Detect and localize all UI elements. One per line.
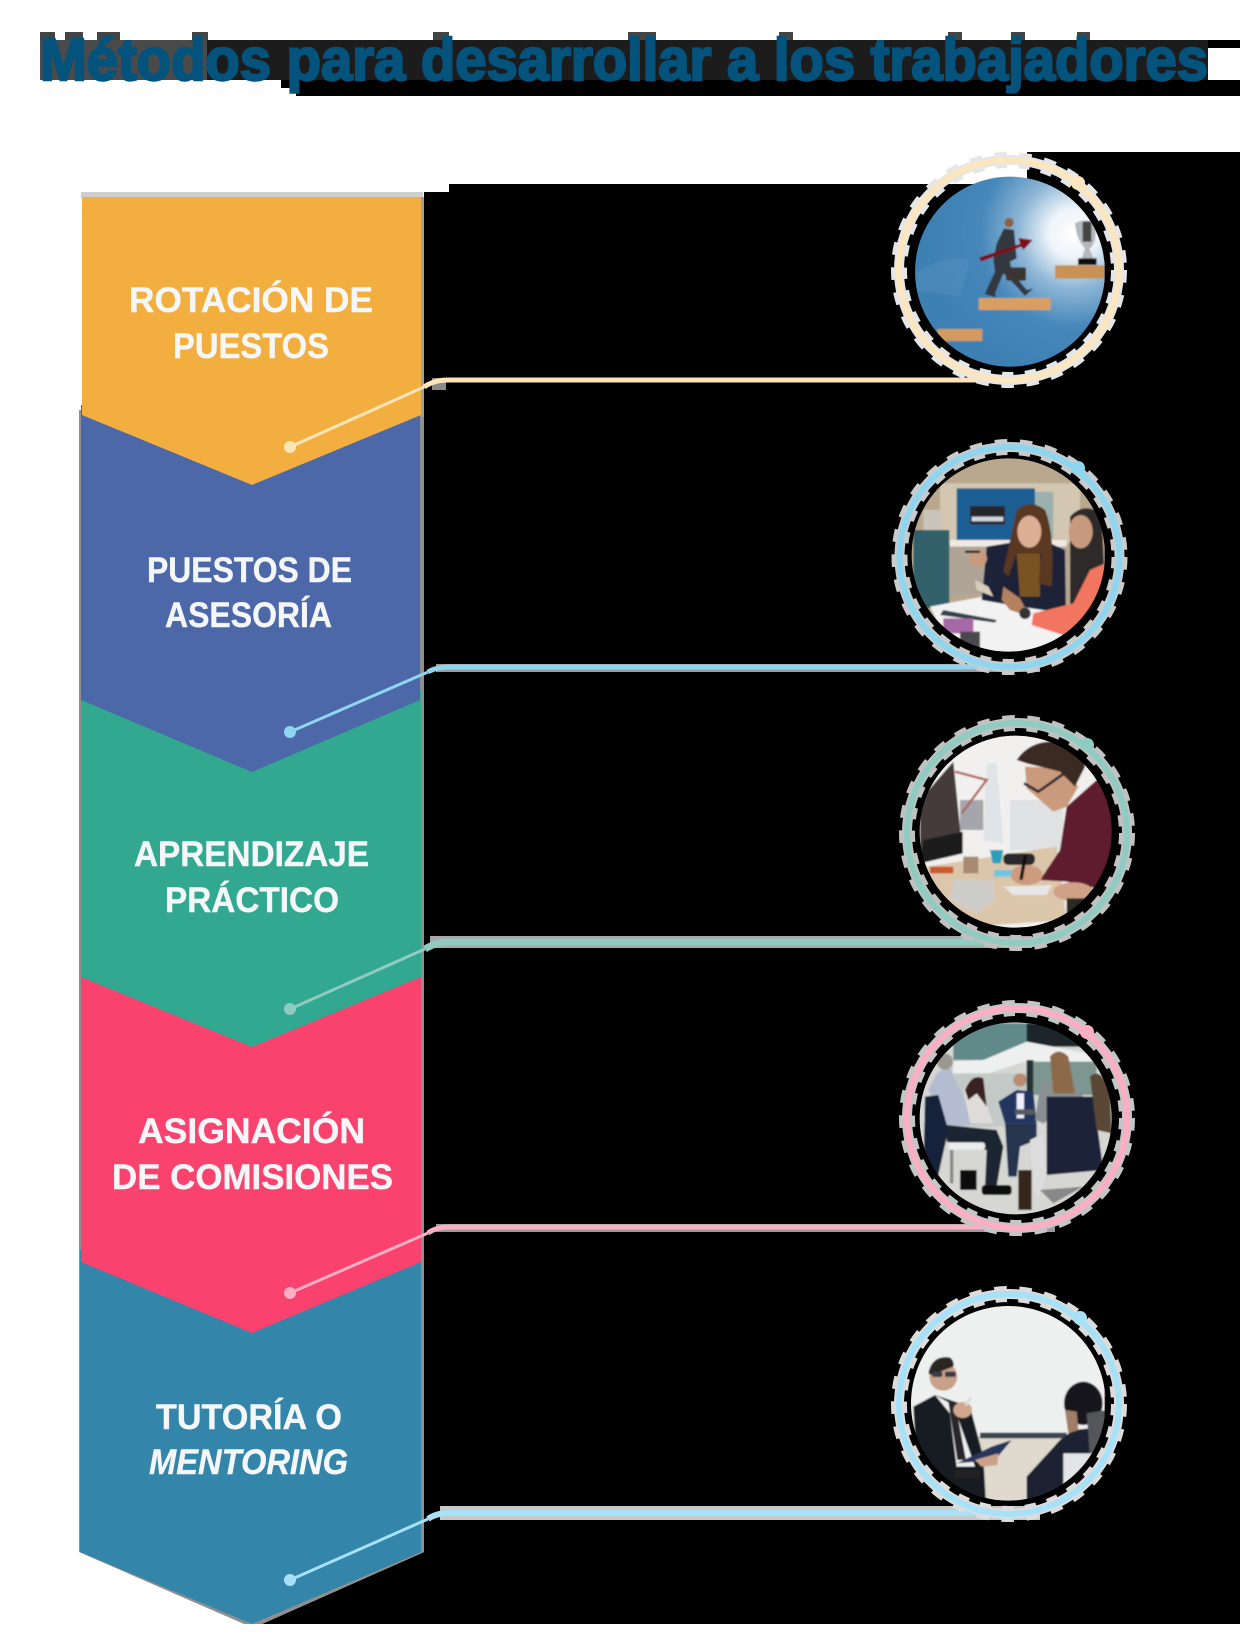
chevron: aprendizaje práctico: APRENDIZAJE [134, 835, 369, 874]
chevron: tutoría o mentoring [80, 1250, 421, 1624]
circle photo 3: hombre escribiendo [907, 723, 1132, 943]
connector 1 [284, 378, 1010, 453]
connector 2 [284, 664, 1040, 738]
title: Métodos para desarrollar a los trabajadores [40, 27, 1208, 93]
chevron: asignación de comisiones [81, 965, 421, 1333]
chevron: tutoría o mentoring: TUTORÍA O [156, 1397, 342, 1437]
chevron: aprendizaje práctico: PRÁCTICO [165, 880, 339, 920]
photo: presenter in suit and seated listener [911, 1306, 1106, 1501]
chevron: puestos de asesoría: PUESTOS DE [147, 551, 352, 590]
chevron: aprendizaje práctico [81, 690, 421, 1047]
circle photo 5: presentador con traje [899, 1294, 1125, 1514]
chevron: rotación de puestos: ROTACIÓN DE [129, 280, 373, 320]
chevron: rotación de puestos: PUESTOS [173, 327, 329, 366]
circle photo 4: grupo de reunión [907, 1008, 1132, 1228]
chevron: asignación de comisiones: ASIGNACIÓN [138, 1111, 365, 1151]
chevron: tutoría o mentoring: MENTORING [149, 1443, 348, 1482]
panel: chevron column [79, 192, 424, 1624]
connector 4 [284, 1224, 1055, 1299]
photo: two women at a desk [912, 458, 1105, 652]
chevron: puestos de asesoría: ASESORÍA [165, 595, 332, 635]
connector 3 [284, 936, 1032, 1015]
photo: man with glasses writing [920, 736, 1112, 928]
chevron: asignación de comisiones: DE COMISIONES [112, 1158, 393, 1197]
photo: team meeting on stools [920, 1022, 1112, 1214]
chevron: rotación de puestos [82, 197, 421, 485]
chevron: puestos de asesoría [81, 405, 420, 772]
circle photo 1: escalera y trofeo [899, 160, 1125, 380]
connector 5 [284, 1506, 1040, 1586]
circle photo 2: dos mujeres en escritorio [900, 447, 1125, 667]
photo: businessman walking up steps [915, 176, 1105, 367]
